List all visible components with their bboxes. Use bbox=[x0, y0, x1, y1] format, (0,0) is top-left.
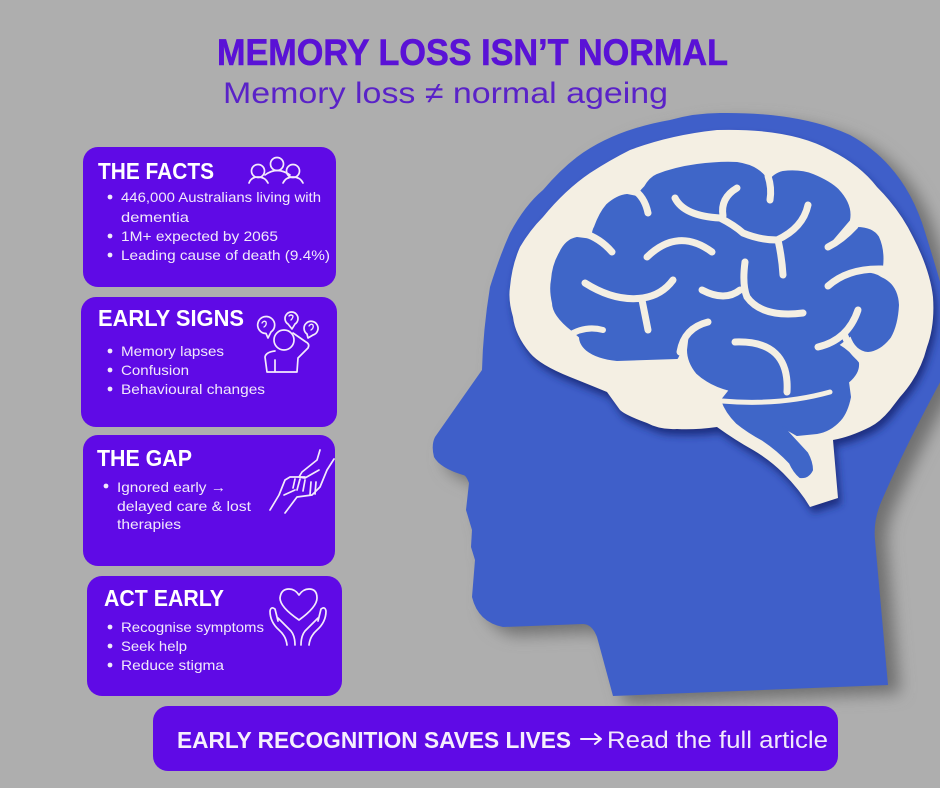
brain shadow bbox=[512, 136, 936, 513]
facts list: 446,000 Australians living with bbox=[121, 189, 321, 205]
act early list: Seek help bbox=[121, 638, 187, 654]
gap list: Ignored early → bbox=[117, 479, 226, 495]
illustration: paper head with brain bbox=[433, 113, 940, 704]
banner link text: Read the full article bbox=[607, 727, 828, 754]
panel: early signs bbox=[81, 297, 337, 427]
early signs list bbox=[108, 343, 265, 397]
banner headline: EARLY RECOGNITION SAVES LIVES bbox=[177, 727, 571, 753]
icon: person with question bubbles bbox=[258, 312, 318, 372]
arrow bbox=[581, 734, 601, 744]
subtitle: Memory loss ≠ normal ageing bbox=[223, 77, 668, 110]
heading: act early: ACT EARLY bbox=[104, 585, 224, 611]
icon: hands holding heart bbox=[270, 589, 326, 645]
brain cream cutout bbox=[509, 130, 933, 507]
panel: act early bbox=[87, 576, 342, 696]
brain sulci bbox=[568, 176, 882, 402]
act early list: Recognise symptoms bbox=[121, 619, 264, 635]
call to action banner bbox=[153, 706, 838, 771]
brain blue lobes bbox=[551, 163, 898, 477]
facts list: Leading cause of death (9.4%) bbox=[121, 247, 330, 263]
head silhouette bbox=[433, 113, 940, 696]
title: MEMORY LOSS ISN’T NORMAL bbox=[217, 32, 728, 73]
act early list: Reduce stigma bbox=[121, 657, 224, 673]
panel: the gap bbox=[83, 435, 335, 566]
early signs list: Memory lapses bbox=[121, 343, 224, 359]
early signs list: Behavioural changes bbox=[121, 381, 265, 397]
early signs list: Confusion bbox=[121, 362, 189, 378]
panel: the facts bbox=[83, 147, 336, 287]
heading: the gap: THE GAP bbox=[97, 445, 192, 471]
gap list bbox=[104, 479, 251, 532]
heading: early signs: EARLY SIGNS bbox=[98, 305, 244, 331]
gap list: delayed care & lost bbox=[117, 498, 251, 514]
head shadow bbox=[445, 121, 940, 704]
icon: holding hands bbox=[270, 450, 334, 513]
heading: the facts: THE FACTS bbox=[98, 158, 214, 184]
icon: people bbox=[249, 158, 303, 183]
act early list bbox=[108, 619, 264, 673]
facts list bbox=[108, 189, 330, 263]
facts list: dementia bbox=[121, 209, 189, 225]
gap list: therapies bbox=[117, 516, 181, 532]
facts list: 1M+ expected by 2065 bbox=[121, 228, 278, 244]
